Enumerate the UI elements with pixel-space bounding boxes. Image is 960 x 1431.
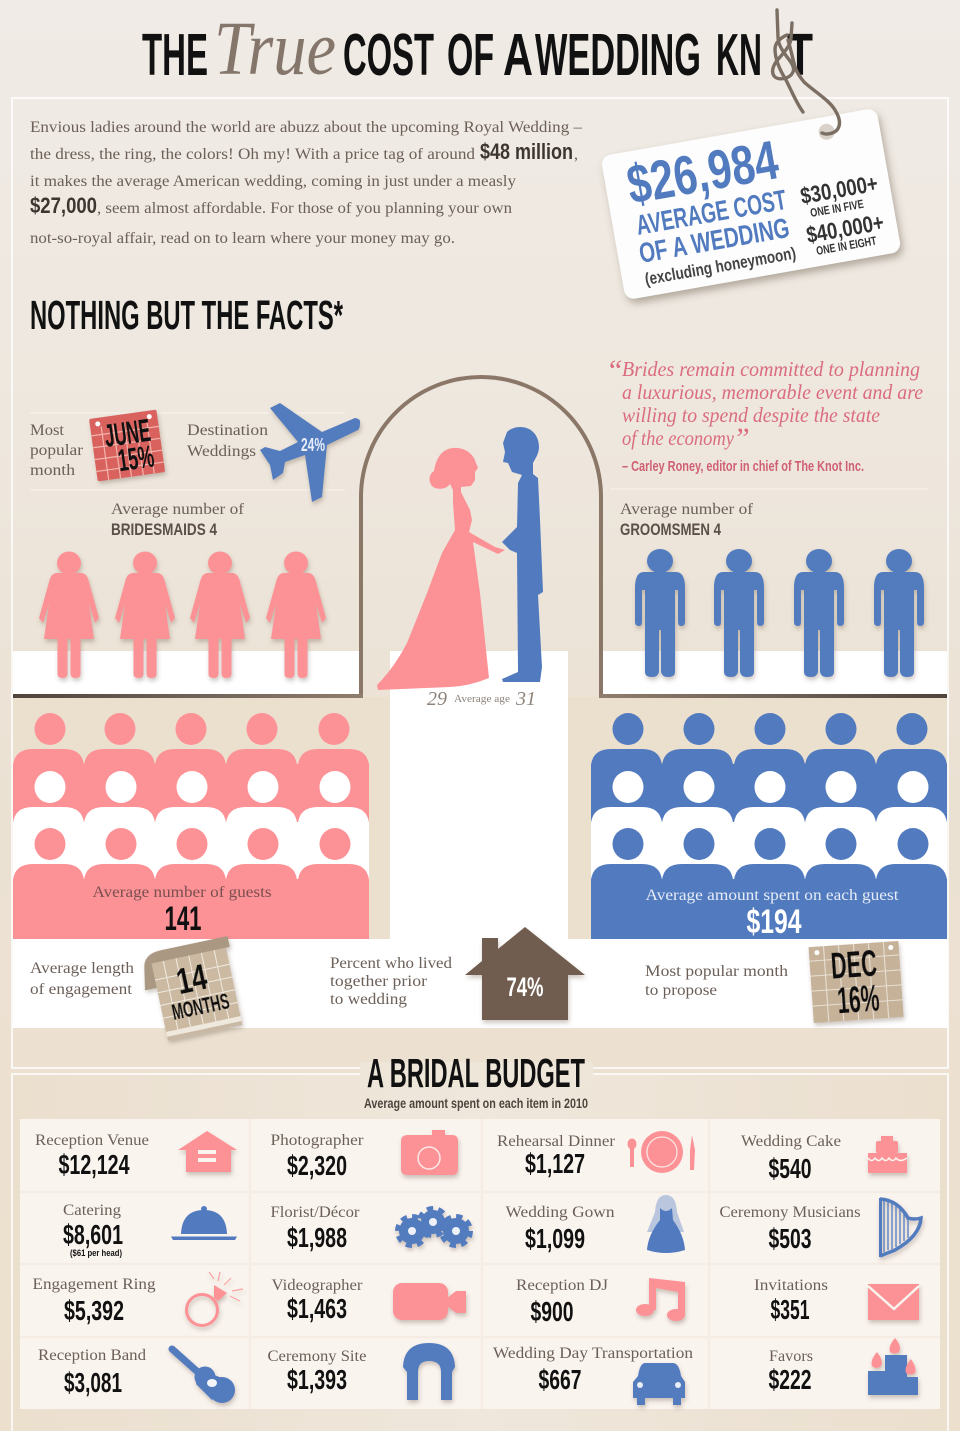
icon: cake [868, 1136, 907, 1173]
heading: a bridal budget [360, 1050, 593, 1111]
intro paragraph: $48 million [480, 139, 573, 164]
intro paragraph: it makes the average American wedding, coming in just under a measly [30, 173, 516, 190]
intro paragraph: , [574, 146, 578, 163]
tag card [600, 108, 902, 300]
stat: spend per guest [646, 887, 899, 941]
stat: lived together: together prior [330, 973, 428, 990]
bridesmaids icons [39, 552, 326, 678]
icon: house 74% [465, 927, 585, 1020]
item: catering [63, 1202, 123, 1259]
item: transportation: $667 [538, 1364, 582, 1395]
tag label [634, 184, 797, 289]
quote attribution: – Carley Roney, editor in chief of The Knot Inc. [622, 458, 864, 475]
stat: month to propose: Most popular month [645, 963, 788, 980]
item: photographer: Photographer [270, 1132, 364, 1149]
icon: house 74%: 74% [506, 972, 544, 1002]
item: rehearsal dinner: $1,127 [525, 1148, 585, 1179]
heading: a bridal budget: Average amount spent on each item in 2010 [364, 1096, 588, 1111]
title: True [214, 7, 336, 91]
item: photographer: $2,320 [287, 1150, 347, 1181]
stat: most popular month: month [30, 462, 75, 479]
item: photographer [270, 1132, 364, 1181]
outer frame bottom [12, 1074, 948, 1431]
icon: candles [868, 1338, 918, 1395]
item: catering: Catering [63, 1202, 121, 1219]
item: videographer: Videographer [272, 1277, 363, 1294]
icon: harp [879, 1198, 921, 1257]
heading: nothing but the facts: NOTHING BUT THE FACTS* [30, 292, 343, 338]
label: bridesmaids [111, 501, 245, 539]
icon: camera [401, 1130, 458, 1175]
quote: “ [606, 354, 623, 387]
tag side stats [798, 170, 886, 258]
average age: Average age [454, 694, 511, 705]
item: favors: $222 [768, 1364, 812, 1395]
tag label: (excluding honeymoon) [643, 244, 797, 289]
item: ceremony musicians: $503 [768, 1223, 812, 1254]
stat: average guests: Average number of guests [92, 884, 272, 901]
item: invitations: Invitations [754, 1277, 828, 1294]
quote: a luxurious, memorable event and are [622, 380, 923, 404]
item: reception venue: Reception Venue [35, 1132, 149, 1149]
quote: ” [733, 422, 750, 455]
title [142, 7, 813, 91]
item: wedding gown: Wedding Gown [506, 1204, 614, 1221]
stat: length of engagement: Average length [30, 960, 134, 977]
label: groomsmen: Average number of [620, 501, 754, 518]
item: florist [270, 1204, 360, 1253]
item: wedding cake: Wedding Cake [741, 1133, 841, 1150]
icon: guitar [172, 1349, 235, 1403]
stat: lived together: to wedding [330, 991, 407, 1008]
tag label: AVERAGE COST [634, 184, 789, 241]
item: reception band [38, 1347, 146, 1398]
icon: tan calendar december: 16% [836, 977, 881, 1021]
stat: month to propose [645, 963, 788, 999]
item: engagement ring: Engagement Ring [32, 1276, 156, 1293]
stat: average guests [92, 884, 272, 938]
quote: willing to spend despite the state [622, 403, 880, 427]
icon: arch [403, 1343, 455, 1400]
title: T [787, 22, 813, 88]
intro paragraph: the dress, the ring, the colors! Oh my! With a price tag of around [30, 146, 475, 163]
item: invitations [754, 1277, 828, 1325]
intro paragraph: Envious ladies around the world are abuzz about the upcoming Royal Wedding – [30, 119, 583, 136]
item: videographer [272, 1277, 363, 1324]
title: WEDDING [535, 22, 701, 88]
stat: most popular month: Most [30, 422, 65, 439]
item: wedding cake [741, 1133, 841, 1184]
outer frame top [12, 98, 948, 1068]
intro paragraph: not-so-royal affair, read on to learn where your money may go. [30, 230, 455, 247]
stat: most popular month: popular [30, 442, 84, 459]
item: reception band: $3,081 [64, 1367, 122, 1398]
item: reception dj: $900 [530, 1296, 574, 1327]
stat: spend per guest: $194 [746, 903, 802, 941]
label: groomsmen [620, 501, 754, 539]
table grid [20, 1119, 940, 1409]
heading: a bridal budget: A BRIDAL BUDGET [367, 1050, 585, 1096]
icon: video camera [393, 1283, 466, 1320]
icon: tan calendar 14 months [138, 936, 246, 1043]
item: reception venue: $12,124 [58, 1149, 130, 1180]
bride figure [377, 448, 505, 690]
average age: 29 [427, 688, 447, 710]
item: transportation: Wedding Day Transportation [493, 1345, 693, 1362]
average age: 31 [515, 688, 536, 710]
budget panel background [13, 1075, 947, 1431]
item: reception dj: Reception DJ [516, 1277, 608, 1294]
intro paragraph [30, 119, 583, 247]
item: ceremony musicians [720, 1204, 860, 1254]
guests: blue crowd [591, 713, 947, 941]
icon: red calendar june: 15% [116, 439, 156, 478]
label: groomsmen: GROOMSMEN 4 [620, 520, 721, 539]
stat: destination weddings: Destination [187, 422, 268, 439]
white floor strips [13, 651, 948, 1028]
label: bridesmaids: BRIDESMAIDS 4 [111, 520, 217, 539]
title: OF [447, 22, 494, 88]
item: videographer: $1,463 [287, 1293, 347, 1324]
tag side stats: ONE IN FIVE [809, 197, 865, 220]
beige panels behind guests [13, 697, 948, 940]
item: ceremony site [268, 1348, 366, 1395]
item: ceremony musicians: Ceremony Musicians [720, 1204, 860, 1221]
tag label: OF A WEDDING [637, 212, 792, 269]
table background [20, 1119, 940, 1409]
tag side stats: $30,000+ [798, 170, 880, 209]
icon: ring [186, 1272, 243, 1326]
icon: car [633, 1363, 685, 1405]
tag amount: $26,984 [622, 128, 783, 216]
stat: month to propose: to propose [645, 982, 717, 999]
icon: house [178, 1131, 237, 1172]
icon: music note [636, 1278, 685, 1321]
item: reception band: Reception Band [38, 1347, 146, 1364]
stat: most popular month [30, 422, 84, 479]
budget table [20, 1119, 940, 1409]
divider lines [30, 413, 928, 490]
stat: lived together: Percent who lived [330, 955, 452, 972]
item: favors: Favors [769, 1348, 813, 1365]
stat: destination weddings [187, 422, 268, 460]
item: florist: $1,988 [287, 1222, 347, 1253]
icon: plate [628, 1131, 695, 1173]
icon: airplane [260, 403, 360, 502]
item: reception dj [516, 1277, 608, 1327]
item: reception venue [35, 1132, 149, 1180]
item: rehearsal dinner [497, 1133, 616, 1179]
quote: of the economy [622, 426, 735, 450]
stat: destination weddings: Weddings [187, 443, 256, 460]
quote: Brides remain committed to planning [622, 357, 920, 381]
item: invitations: $351 [770, 1294, 810, 1325]
icon: airplane: 24% [301, 435, 325, 455]
stat: lived together [330, 955, 452, 1008]
title: KN [716, 22, 762, 88]
arch [13, 377, 947, 698]
item: favors [768, 1348, 813, 1395]
quote [606, 354, 923, 455]
item: engagement ring: $5,392 [64, 1295, 124, 1326]
item: catering: $8,601 [63, 1219, 123, 1250]
icon: tan calendar december: DEC [829, 943, 878, 987]
item: florist: Florist/Décor [270, 1204, 360, 1221]
item: transportation [493, 1345, 693, 1395]
icon: tan calendar 14 months: 14 [173, 956, 211, 1002]
label: bridesmaids: Average number of [111, 501, 245, 518]
intro paragraph: $27,000 [30, 193, 97, 218]
intro paragraph: , seem almost affordable. For those of you planning your own [97, 200, 512, 217]
title: COST [343, 22, 434, 88]
icon: red calendar june [89, 410, 165, 481]
icon: red calendar june: JUNE [102, 412, 153, 454]
stat: spend per guest: Average amount spent on each guest [646, 887, 899, 904]
groom figure [502, 427, 543, 682]
icon: flowers [398, 1209, 470, 1245]
item: wedding gown [506, 1204, 614, 1254]
item: catering: ($61 per head) [70, 1248, 122, 1259]
stat: length of engagement: of engagement [30, 981, 133, 998]
tag side stats: ONE IN EIGHT [815, 233, 878, 258]
icon: cloche [171, 1206, 237, 1240]
item: ceremony site: $1,393 [287, 1364, 347, 1395]
stat: average guests: 141 [164, 900, 202, 938]
icon: tan calendar 14 months: MONTHS [170, 988, 232, 1025]
item: wedding cake: $540 [768, 1153, 812, 1184]
tag side stats: $40,000+ [804, 209, 886, 248]
price tag [600, 108, 902, 300]
stat: length of engagement [30, 960, 134, 998]
guests: pink crowd [13, 713, 369, 939]
groomsmen icons [635, 549, 924, 677]
title: THE [142, 22, 208, 88]
title: A [503, 22, 533, 88]
item: engagement ring [32, 1276, 156, 1326]
icon: envelope [868, 1284, 919, 1320]
item: wedding gown: $1,099 [525, 1223, 585, 1254]
icon: rope knot [773, 10, 839, 134]
icon: tan calendar december [809, 941, 904, 1023]
item: ceremony site: Ceremony Site [268, 1348, 366, 1365]
average age [427, 688, 536, 710]
item: rehearsal dinner: Rehearsal Dinner [497, 1133, 616, 1150]
icon: gown [647, 1195, 685, 1253]
